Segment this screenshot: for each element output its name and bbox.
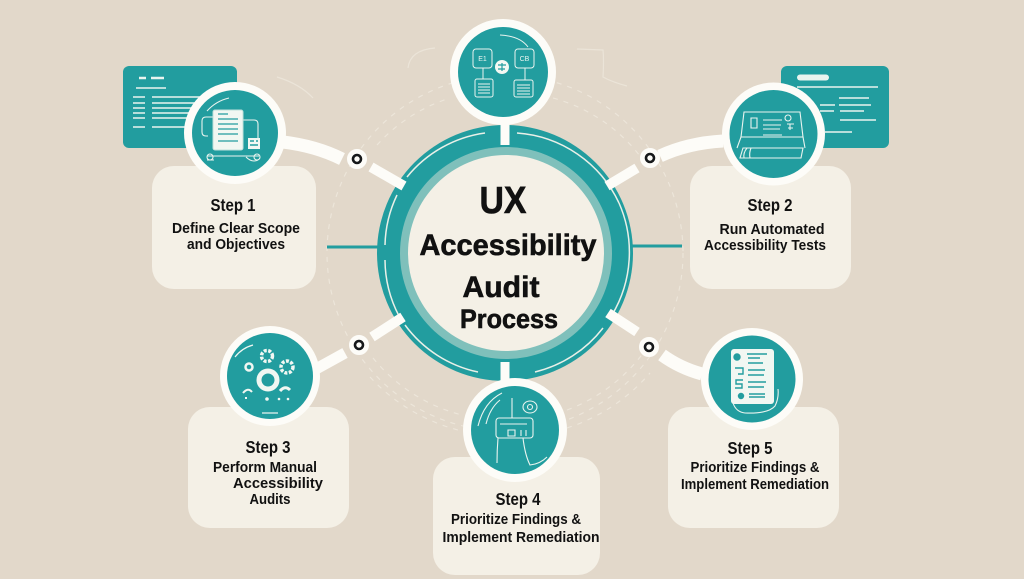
center hub (377, 125, 633, 381)
panel: step 2 (690, 166, 851, 289)
panel: step 4: Step 4 (496, 489, 541, 509)
panel: step 4 (433, 457, 600, 575)
hub title: Process (460, 304, 558, 334)
hub title: Accessibility (420, 229, 597, 262)
panel: step 1: Define Clear Scope (172, 221, 300, 237)
icon: laptop automated test (722, 82, 825, 186)
hub title (420, 180, 597, 334)
teal document card right (781, 66, 889, 148)
panel: step 5: Implement Remediation (681, 477, 829, 493)
icon: workflow diagram: E1 (478, 56, 487, 63)
panel: step 3: Audits (250, 492, 290, 508)
panel: step 3: Step 3 (246, 437, 291, 457)
panel: step 1 (152, 166, 316, 289)
icon: remediation device (463, 378, 567, 482)
teal document card left (123, 66, 237, 148)
panel: step 3 (188, 407, 349, 528)
panel: step 2: Step 2 (748, 195, 793, 215)
panel: step 2: Accessibility Tests (704, 238, 826, 254)
hub title: UX (480, 180, 527, 222)
panel: step 1: and Objectives (187, 237, 285, 253)
panel: step 1: Step 1 (210, 195, 256, 215)
panel: step 2: Run Automated (720, 222, 824, 238)
connectors between hub and steps (283, 124, 723, 382)
panel: step 5 (668, 407, 839, 528)
icon: manual audit gears (220, 326, 320, 426)
panel: step 4: Implement Remediation (442, 530, 600, 546)
panel: step 3: Accessibility (233, 476, 323, 492)
hub title: Audit (462, 271, 540, 304)
panel: step 5: Prioritize Findings & (690, 460, 820, 476)
icon: audit document (184, 82, 286, 184)
connector nodes (348, 148, 660, 356)
icon: workflow diagram (450, 19, 556, 125)
icon: workflow diagram: CB (520, 56, 530, 63)
panel: step 4: Prioritize Findings & (451, 512, 581, 528)
icon: findings checklist (701, 328, 803, 430)
panel: step 5: Step 5 (728, 438, 773, 458)
panel: step 3: Perform Manual (213, 460, 317, 476)
